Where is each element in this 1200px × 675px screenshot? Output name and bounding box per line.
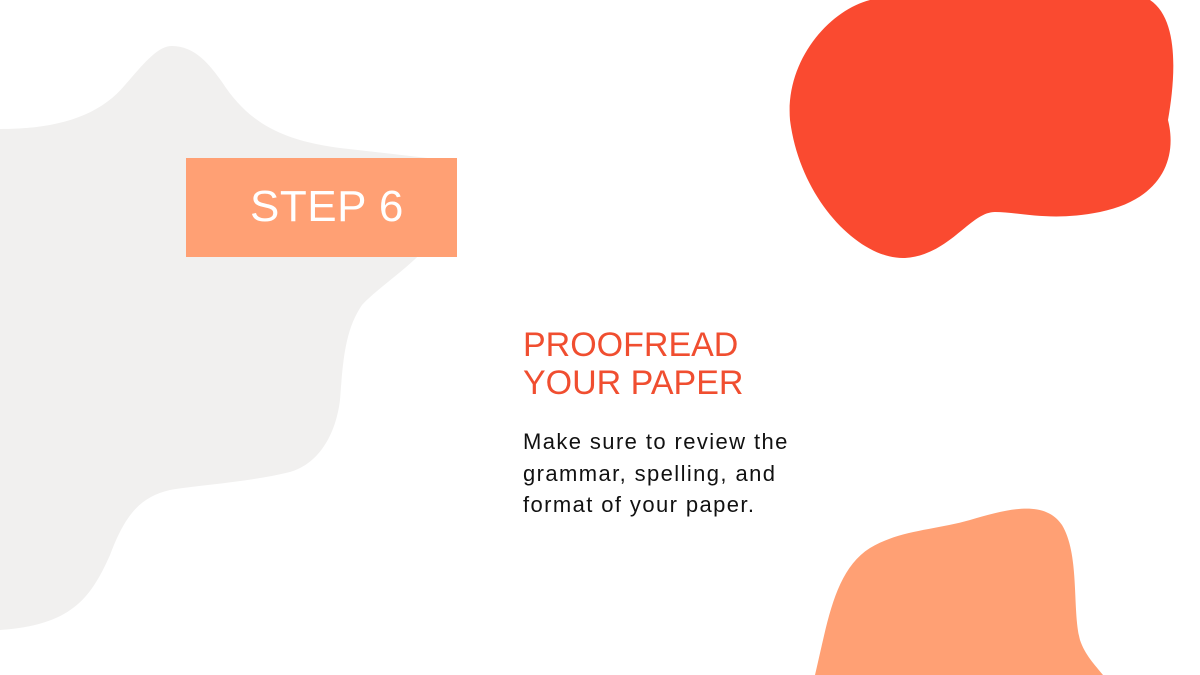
description text: grammar, spelling, and: [523, 460, 776, 486]
step label text: STEP 6: [250, 182, 404, 231]
blob: red top right: [790, 0, 1173, 258]
blob: peach bottom right: [815, 509, 1103, 675]
heading: PROOFREAD: [523, 326, 738, 364]
heading: YOUR PAPER: [523, 364, 743, 402]
blob: gray left: [0, 46, 445, 630]
step label box: [186, 158, 457, 257]
description text: [523, 429, 789, 517]
heading: [523, 326, 743, 402]
description text: format of your paper.: [523, 492, 755, 517]
description text: Make sure to review the: [523, 429, 789, 454]
